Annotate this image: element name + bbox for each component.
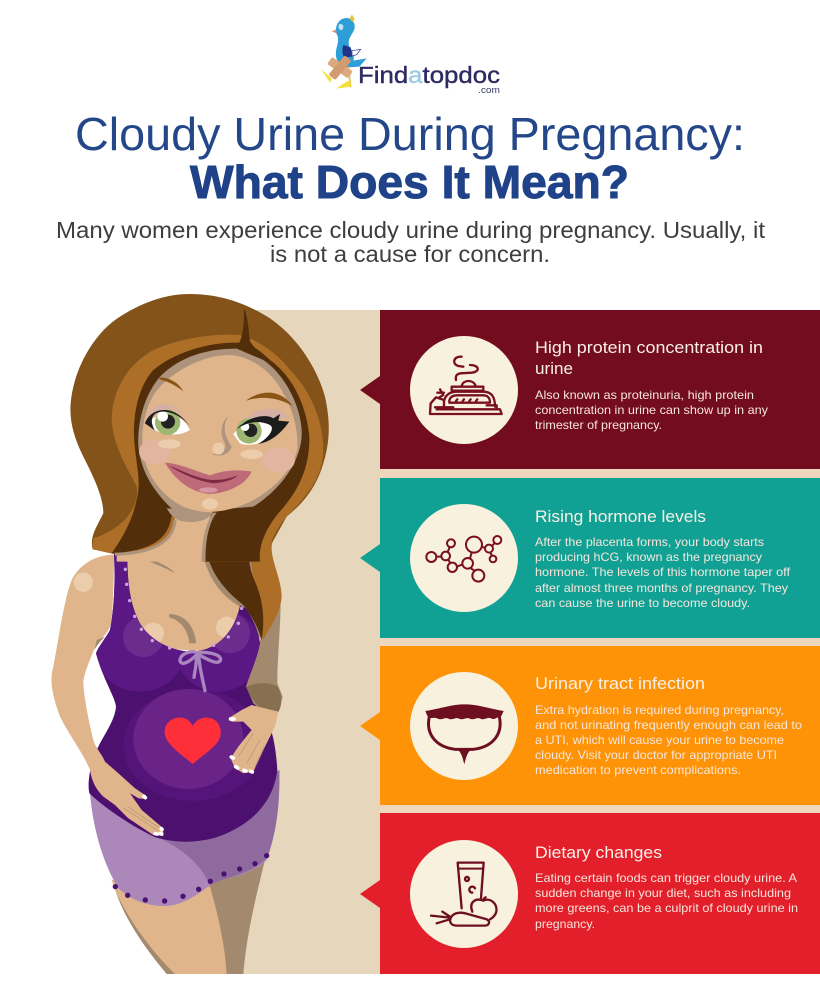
body text: sudden change in your diet, such as including bbox=[535, 886, 791, 900]
illustration: pregnant woman bbox=[51, 294, 329, 974]
panel: high protein: urine bbox=[535, 360, 573, 378]
panel separators bbox=[380, 310, 820, 974]
face shadow bbox=[138, 349, 302, 513]
far arm bbox=[243, 600, 283, 712]
icon: molecule bbox=[426, 536, 501, 582]
hair over shoulder bbox=[201, 540, 262, 640]
face bbox=[142, 355, 297, 512]
heading: Dietary changes bbox=[535, 844, 662, 862]
body text: cloudy. Visit your doctor for appropriate UTI bbox=[535, 748, 777, 762]
eye left bbox=[147, 414, 190, 434]
panel: dietary changes bbox=[360, 813, 820, 974]
body text: can cause the urine to become cloudy. bbox=[535, 596, 750, 610]
logo wordmark: Findatopdoc bbox=[358, 62, 500, 88]
woman head bbox=[70, 294, 329, 562]
body text: after almost three months of pregnancy. They bbox=[535, 581, 788, 595]
skirt bbox=[90, 770, 279, 906]
body text: medication to prevent complications. bbox=[535, 763, 741, 777]
lips bbox=[165, 463, 252, 494]
icon: juice, apple and carrot bbox=[431, 863, 496, 926]
panel background bbox=[360, 646, 820, 805]
icon circle bbox=[410, 672, 518, 780]
intro text: is not a cause for concern. bbox=[270, 241, 550, 267]
body text bbox=[535, 388, 768, 432]
mid hair bbox=[93, 335, 323, 562]
neckline dots bbox=[123, 555, 243, 650]
bandage bbox=[327, 57, 353, 78]
icon circle bbox=[410, 336, 518, 444]
body text: Extra hydration is required during pregnancy, bbox=[535, 703, 784, 717]
eyebrows bbox=[159, 377, 183, 391]
title line 1: Cloudy Urine During Pregnancy: bbox=[75, 108, 745, 160]
back hair bbox=[247, 540, 282, 640]
icon: food dish bbox=[430, 357, 502, 418]
panel background bbox=[360, 478, 820, 638]
heading: Urinary tract infection bbox=[535, 675, 705, 693]
body text: trimester of pregnancy. bbox=[535, 418, 662, 432]
body text: a UTI, which will cause your urine to become bbox=[535, 733, 784, 747]
chest skin bbox=[114, 540, 242, 653]
skirt dots bbox=[113, 853, 269, 904]
foot bbox=[321, 69, 332, 83]
bow bbox=[180, 652, 221, 691]
body text bbox=[535, 535, 791, 610]
title bbox=[75, 108, 745, 208]
logo .com: .com bbox=[478, 85, 500, 96]
body text: Also known as proteinuria, high protein bbox=[535, 388, 754, 402]
part line bbox=[239, 308, 257, 350]
body text: pregnancy. bbox=[535, 917, 595, 931]
body text: After the placenta forms, your body starts bbox=[535, 535, 764, 549]
panel background bbox=[360, 813, 820, 974]
eyeshadow bbox=[147, 404, 187, 418]
intro text bbox=[56, 217, 766, 267]
body text: concentration in urine can show up in any bbox=[535, 403, 768, 417]
panel: rising hormone levels bbox=[360, 478, 820, 638]
icon: heart bbox=[165, 718, 221, 764]
body text: hormone. The levels of this hormone taper off bbox=[535, 565, 791, 579]
beige backdrop bbox=[240, 310, 380, 974]
body text: producing hCG, known as the pregnancy bbox=[535, 550, 762, 564]
cheeks and highlights bbox=[139, 439, 171, 464]
body text bbox=[535, 703, 802, 777]
icon circle bbox=[410, 504, 518, 612]
logo: Findatopdoc bbox=[321, 15, 500, 96]
body text: more greens, can be a culprit of cloudy urine in bbox=[535, 901, 798, 915]
icon: duck mascot bbox=[321, 15, 367, 89]
icon: bladder bbox=[425, 704, 504, 764]
title line 2: What Does It Mean? bbox=[190, 156, 629, 208]
heading: Rising hormone levels bbox=[535, 508, 706, 526]
near arm and hand bbox=[51, 555, 163, 836]
heading: High protein concentration in bbox=[535, 339, 763, 357]
panel background bbox=[360, 310, 820, 469]
outer hair bbox=[70, 294, 329, 562]
legs bbox=[207, 853, 267, 974]
dress top bbox=[89, 554, 277, 842]
intro text: Many women experience cloudy urine during pregnancy. Usually, it bbox=[56, 217, 766, 243]
icon circle bbox=[410, 840, 518, 948]
body text: Eating certain foods can trigger cloudy urine. A bbox=[535, 871, 797, 885]
dark hair frame bbox=[112, 343, 309, 562]
body text bbox=[535, 871, 798, 931]
nose bbox=[212, 416, 232, 456]
woman body bbox=[51, 540, 283, 974]
neck bbox=[117, 507, 213, 562]
body text: and not urinating frequently enough can lead to bbox=[535, 718, 802, 732]
panel: high protein bbox=[360, 310, 820, 469]
panel: urinary tract infection bbox=[360, 646, 820, 805]
eye right bbox=[233, 421, 280, 445]
far hand bbox=[228, 705, 278, 773]
